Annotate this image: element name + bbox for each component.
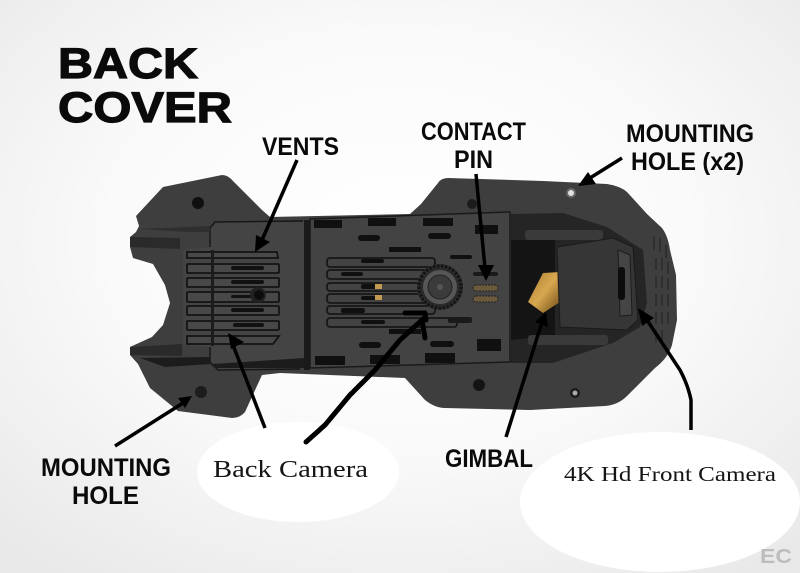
arrow: contact pin [476, 174, 485, 268]
gimbal arms [525, 230, 603, 240]
vent breaks [211, 250, 214, 346]
watermark: EC [760, 546, 792, 568]
arrow: vents [262, 160, 297, 240]
title: BACK [58, 40, 198, 88]
arrow: back camera scribble [306, 313, 426, 442]
panel outline [210, 221, 303, 370]
side tabs [130, 237, 180, 249]
vent slots left [231, 266, 264, 327]
dark pocket [511, 240, 555, 340]
label: mounting hole: HOLE [72, 482, 139, 510]
callout: back camera [197, 422, 399, 522]
callout: front camera [520, 432, 800, 572]
label: contact pin [421, 118, 526, 174]
label: contact pin: CONTACT [421, 118, 526, 146]
label: contact pin: PIN [454, 146, 493, 174]
label: mounting hole [41, 454, 171, 510]
callout: back camera: Back Camera [213, 457, 368, 483]
right ridge texture [654, 236, 668, 342]
callout: front camera: 4K Hd Front Camera [564, 462, 777, 486]
gimbal bay [511, 213, 647, 363]
contact pin springs [448, 272, 498, 323]
screw left [250, 287, 266, 303]
title: COVER [58, 84, 232, 132]
label: mounting hole x2 [626, 120, 754, 176]
arrowheads [178, 172, 654, 408]
divider [304, 220, 310, 370]
dark band lower left [140, 357, 305, 368]
gold contacts small [375, 284, 382, 289]
center slots [314, 218, 501, 365]
arrows [115, 158, 691, 446]
arrow: mounting hole x2 [590, 158, 622, 178]
body outline [130, 175, 677, 418]
arrow: mounting hole [115, 403, 183, 446]
back cover photo [130, 175, 677, 418]
arrow: front camera [645, 317, 691, 430]
center panel [310, 212, 510, 368]
label: mounting hole x2: MOUNTING [626, 120, 754, 148]
title [58, 40, 232, 132]
mounting holes [192, 197, 204, 209]
left panel [183, 221, 305, 370]
vents left [187, 252, 279, 344]
center vents [327, 258, 457, 327]
gear [417, 264, 463, 310]
arrow: vents lower [233, 345, 265, 428]
arrow: gimbal [506, 322, 542, 437]
label: vents: VENTS [262, 133, 339, 161]
label: mounting hole x2: HOLE (x2) [631, 148, 744, 176]
label: gimbal: GIMBAL [445, 445, 533, 473]
label: mounting hole: MOUNTING [41, 454, 171, 482]
gold ribbon [528, 272, 560, 313]
camera block [557, 238, 638, 330]
